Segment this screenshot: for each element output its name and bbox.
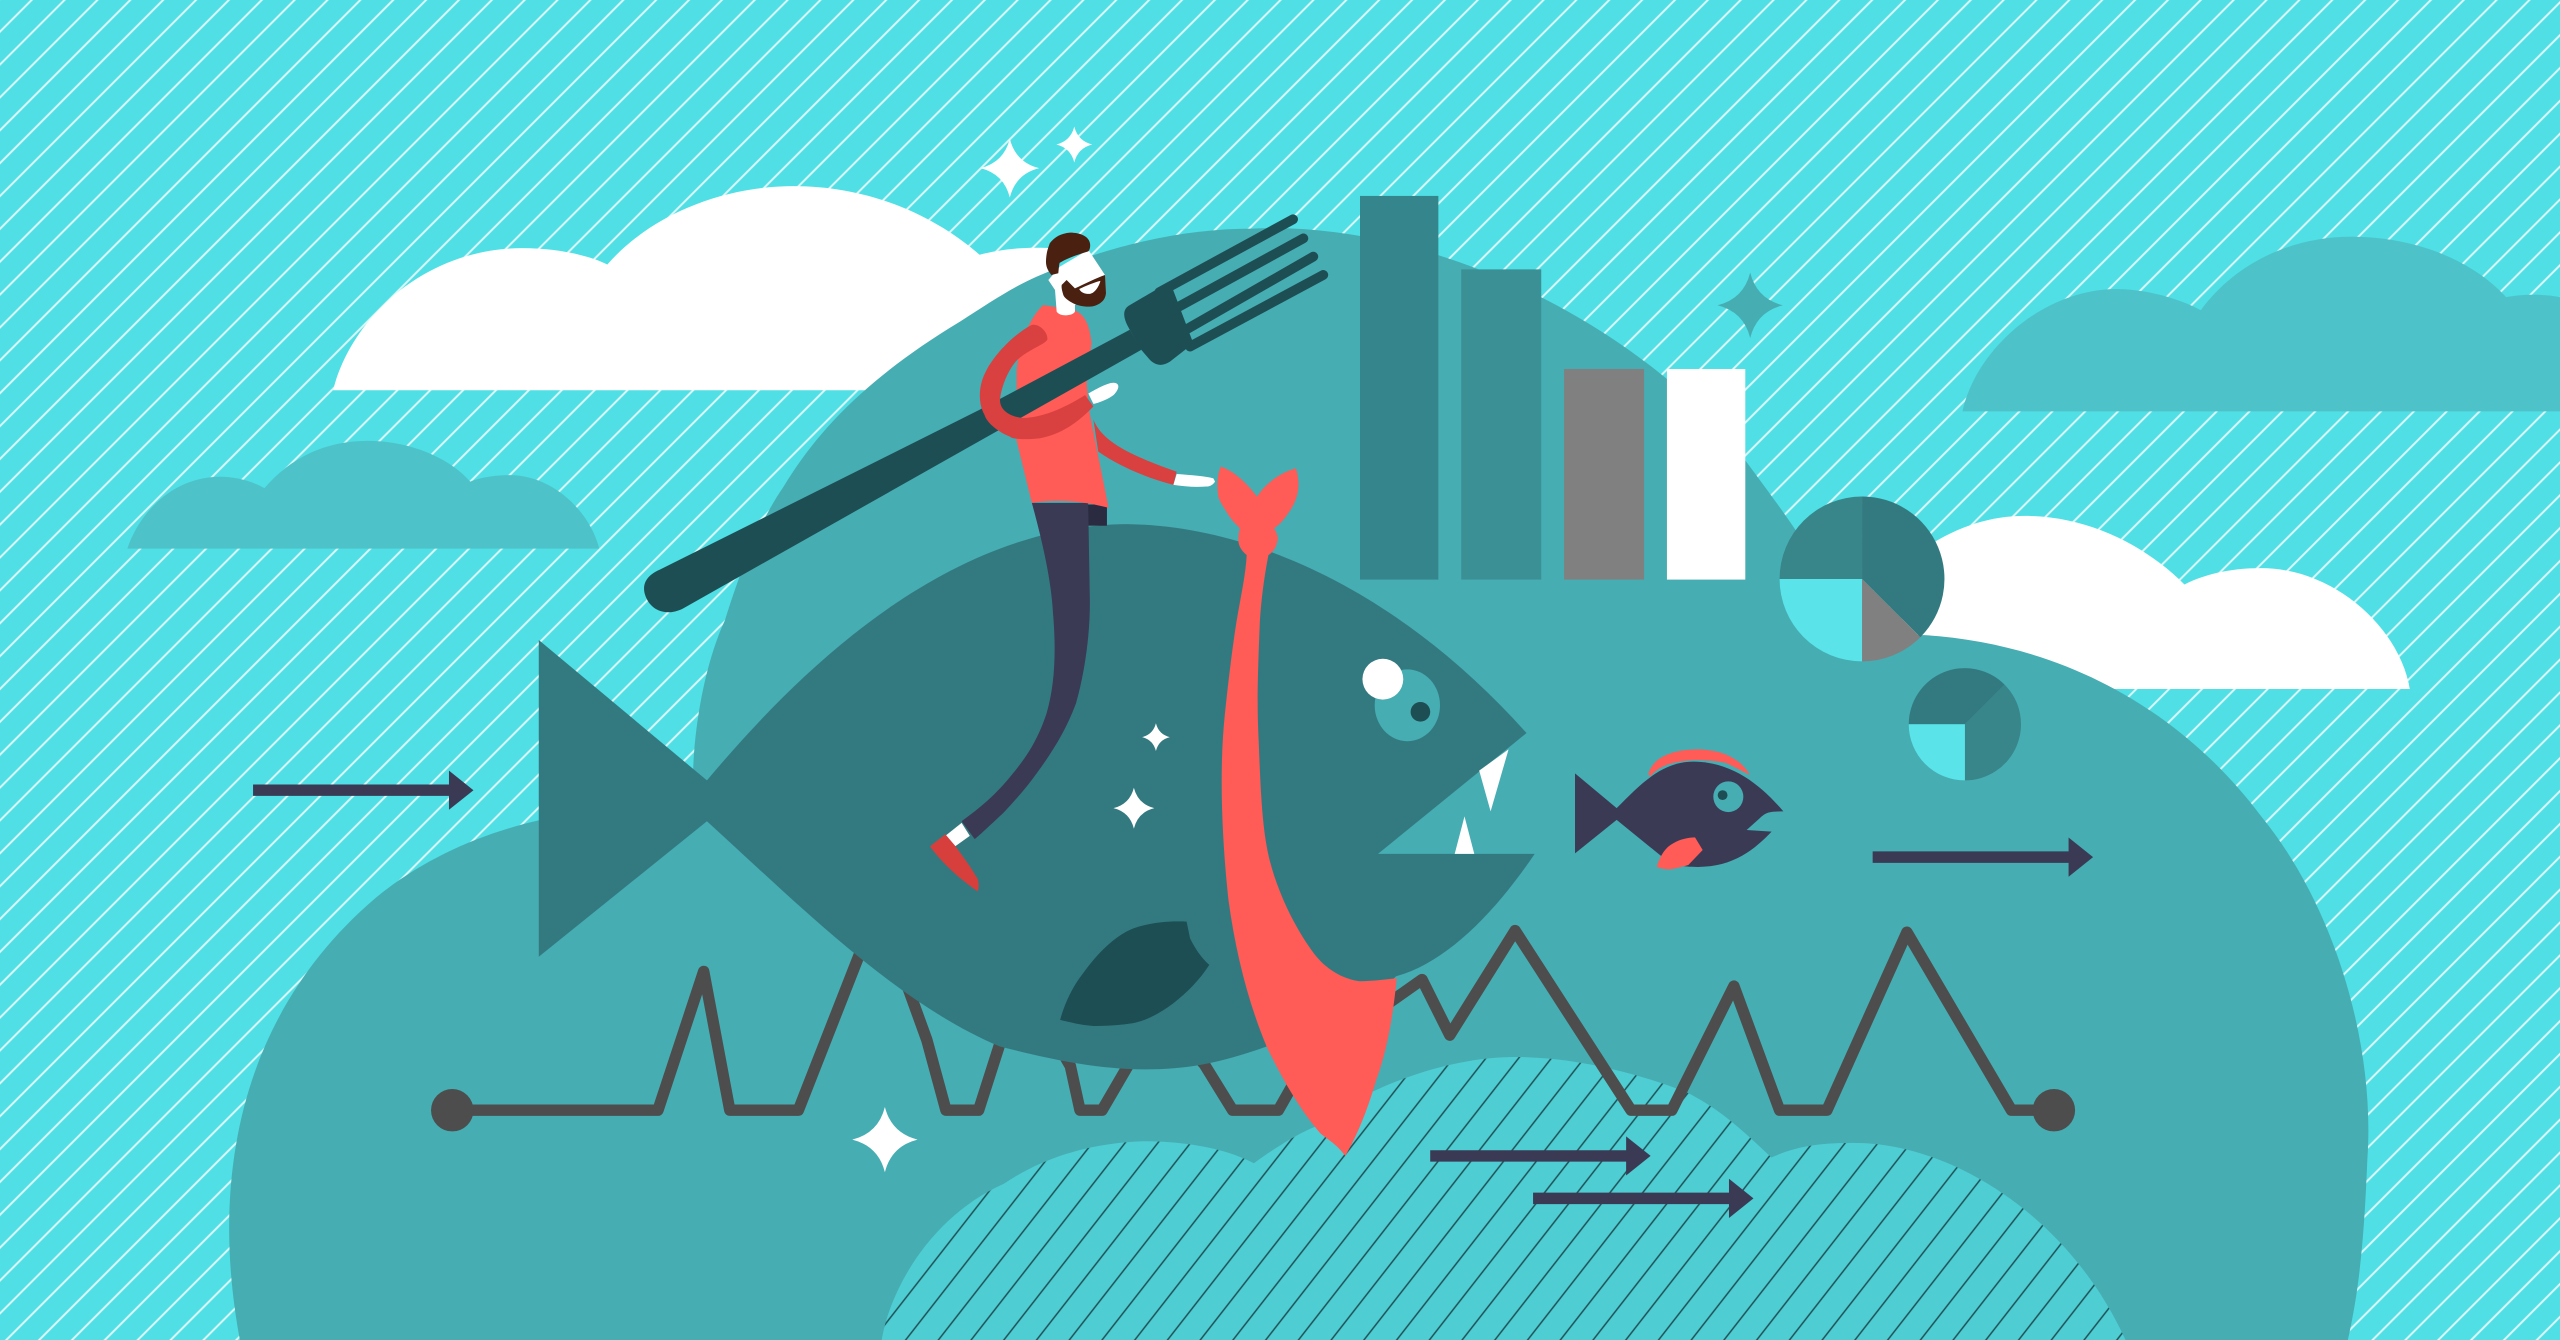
arrow right [1873,838,2093,877]
coral fish skeleton tail [1217,467,1397,1156]
teal cloud right [1962,237,2560,411]
giant fork [644,219,1323,612]
fish eye [1362,659,1440,741]
torso [1017,305,1109,508]
extended hand [1173,474,1215,487]
dorsal fin [1648,749,1750,777]
arrow bottom upper [1430,1136,1651,1176]
hand on fork [1088,383,1118,404]
mouth [1079,281,1100,294]
bar 3 [1564,369,1644,580]
small navy fish [1575,749,1783,869]
upper tooth [1479,749,1509,811]
bar 4 [1667,369,1745,580]
back leg stub [1084,504,1107,526]
teal cloud left [127,441,599,549]
sock [945,823,970,846]
lower tooth [1455,816,1474,854]
person with fork [644,219,1323,891]
white cloud left [333,186,1078,390]
fork tines [1159,219,1323,347]
bar 2 [1461,269,1541,580]
fish body and tail [539,524,1535,1069]
head [1046,233,1106,315]
extended arm [1093,420,1177,485]
arrow bottom lower [1533,1179,1753,1218]
fork handle [644,330,1141,612]
shoe [930,834,979,891]
sparkle bottom [852,1107,918,1172]
arm wrapping fork [980,325,1093,439]
bar 1 [1360,196,1438,580]
hair [1046,233,1090,275]
small pie chart [1909,668,2021,780]
sparkle top large [980,139,1039,198]
body and tail [1575,762,1783,867]
pectoral fin [1657,837,1703,869]
big teal blob background [229,228,2368,1340]
sparkle teal [1718,273,1783,338]
body sparkle small [1142,723,1170,751]
sparkle top small [1056,127,1092,162]
line end dot [2033,1089,2075,1131]
line start dot [431,1089,473,1131]
large pie chart [1780,496,1944,661]
fork head [1124,282,1193,365]
beard [1062,275,1106,307]
white cloud right [1878,516,2410,689]
body sparkle large [1113,788,1154,829]
arrow left [253,771,473,810]
front leg [962,503,1090,839]
bar chart [1360,196,1745,580]
hatched hill [882,1057,2126,1340]
face [1048,250,1105,315]
zigzag line chart [431,906,2075,1131]
big fish [539,524,1535,1069]
eye [1713,781,1743,812]
fish fin [1060,921,1209,1026]
